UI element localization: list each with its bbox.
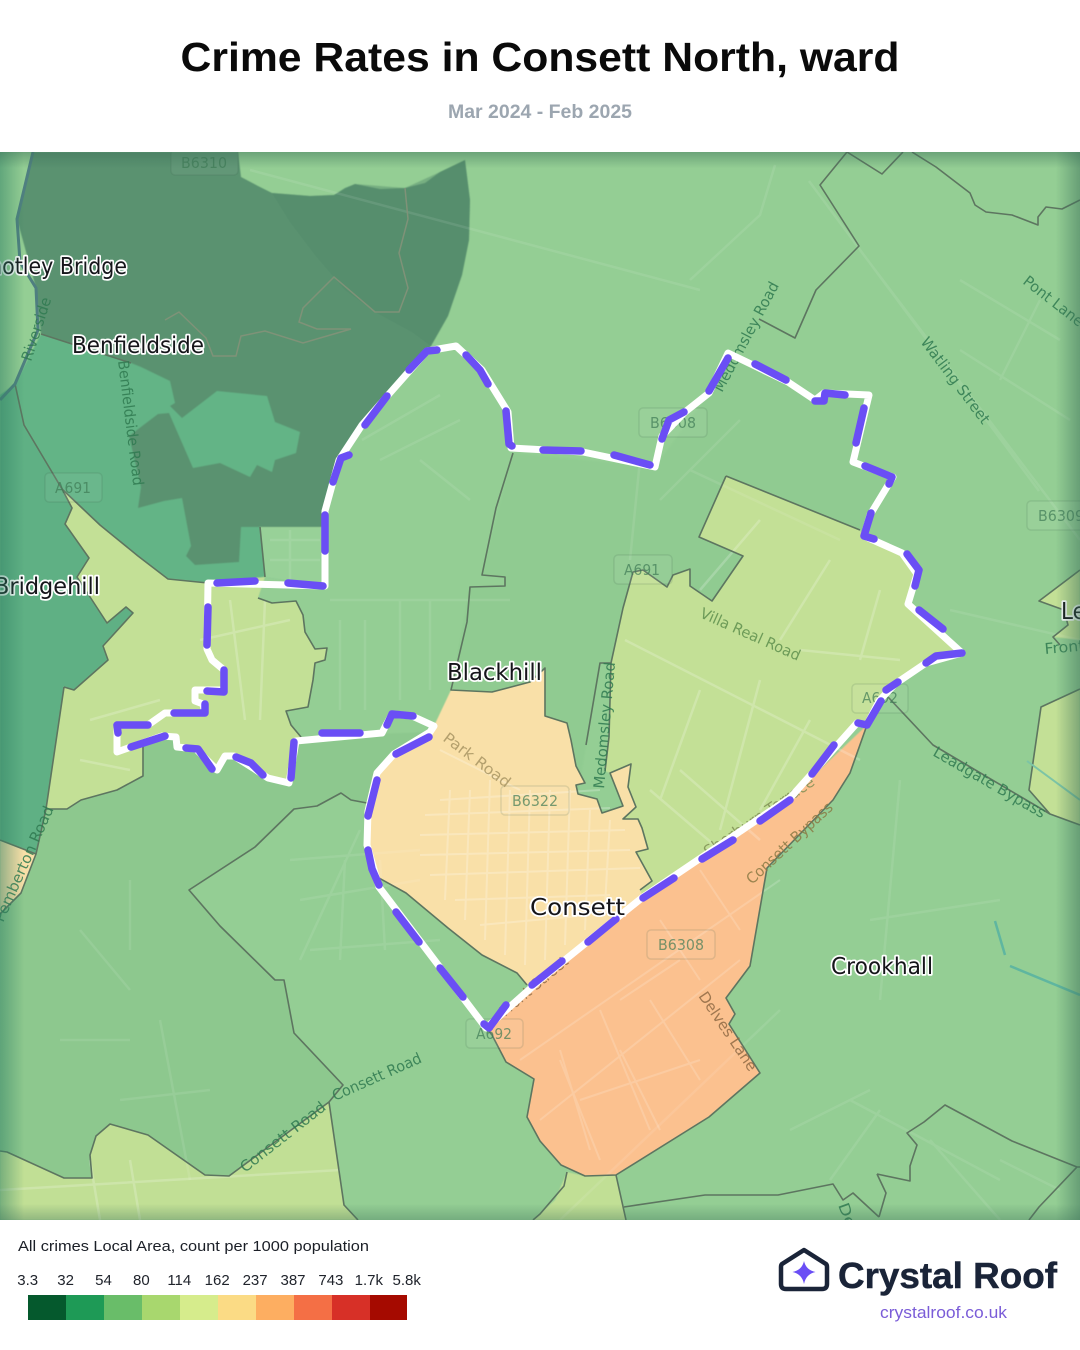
area: yellow-green Leadgate [1039,570,1080,640]
area: yellow-green east [605,476,962,897]
legend scale labels: 387 [280,1272,306,1289]
legend scale labels: 114 [167,1272,191,1289]
legend scale labels: 743 [318,1272,343,1289]
legend scale labels [17,1272,421,1289]
badge: A691 west: A691 [55,479,91,497]
choropleth areas [0,152,1080,1220]
ward boundary: Consett North [117,346,962,1028]
badge: A692 east [852,684,908,713]
legend scale labels: 1.7k [355,1272,383,1289]
icon: house outline with star [781,1250,827,1289]
badge: B6310 [170,157,237,168]
legend scale labels: 237 [243,1272,268,1289]
area: yellow-green west [46,489,327,809]
legend scale labels: 3.3 [17,1272,38,1289]
place: Blackhill: Blackhill [447,660,542,686]
road label: Park Road: Park Road [440,729,514,791]
road network [0,165,1080,1220]
badge: B6310: B6310 [181,154,227,172]
badge: B6308 north [639,408,707,437]
logo: Crystal Roof [781,1250,1058,1322]
road label: Riverside: Riverside [18,295,55,363]
road name labels [0,272,1080,1235]
place labels [0,254,1080,980]
road label: Consett Road south: Consett Road [236,1098,329,1176]
title: Crime Rates in Consett North, ward [180,34,900,80]
badge: A691 west [45,473,102,502]
place: Consett: Consett [530,895,625,921]
road label: Medomsley Road south: Medomsley Road [590,661,619,789]
badge: B6322: B6322 [512,792,558,810]
legend title: All crimes Local Area, count per 1000 population [18,1238,369,1255]
legend scale labels: 5.8k [393,1272,421,1289]
badge: A691 centre [614,555,672,584]
area: central darker tone [451,353,893,794]
road label: Front Street: Front Street [496,952,572,1020]
route number badges [45,150,1080,1048]
area: orange diagonal fill [796,728,865,800]
area: orange high crime [490,868,766,1176]
badge: B6309 [1027,501,1080,530]
legend scale labels: 32 [57,1272,74,1289]
ward dashes purple [117,350,962,1028]
road label: Villa Real Road: Villa Real Road [697,604,803,665]
road label: Sherburn Terrace: Sherburn Terrace [700,773,818,860]
website link: crystalroof.co.uk [880,1304,1008,1322]
road label: Consett Bypass: Consett Bypass [742,798,837,888]
badge: A692 east: A692 [862,689,898,707]
area: mid green strip far west [0,384,133,854]
area: dark green lowest crime [17,152,470,565]
road label: Delves south: Del [834,1200,861,1235]
legend scale labels: 162 [205,1272,230,1289]
road label: Watling Street: Watling Street [917,334,994,428]
ward outline white [117,346,962,1028]
badge: A691 centre: A691 [624,561,660,579]
legend colour bar [28,1295,407,1320]
area: yellow-green south [533,1172,626,1220]
badge: A692 west: A692 [476,1025,512,1043]
area: pale orange Consett [367,668,652,985]
area: mid green west [15,334,325,586]
area: yellow-green south-west [0,1102,358,1220]
badge: B6308 north: B6308 [650,414,696,432]
road label: Leadgate Bypass: Leadgate Bypass [930,743,1049,822]
boundary lines of neighbouring areas [0,152,1080,1220]
place: Crookhall: Crookhall [831,954,933,980]
badge: B6308 south: B6308 [658,936,704,954]
road label: Delves Lane: Delves Lane [695,988,761,1075]
road label: Benfieldside Road: Benfieldside Road [114,359,147,487]
area: yellow-green east edge [1029,689,1080,825]
map edge shading [0,152,1080,1220]
subtitle: date range: Mar 2024 - Feb 2025 [448,102,632,123]
badge: B6322 [501,786,569,815]
area: lighter residential cell [260,526,322,582]
road label: Consett Road north: Consett Road [329,1049,424,1105]
area: darker lobe inside dark green [358,172,438,190]
logo wordmark: Crystal Roof [838,1255,1058,1296]
legend [17,1238,421,1320]
legend scale labels: 80 [133,1272,150,1289]
area: south-west darker green [0,732,430,1178]
area: pale orange far west [0,840,36,914]
badge: A692 west [466,1019,523,1048]
place: Benfieldside: Benfieldside [72,333,204,359]
badge: B6308 south [647,930,715,959]
legend scale labels: 54 [95,1272,112,1289]
road label: Medomsley Road north: Medomsley Road [710,279,783,395]
map base: low crime green [0,152,1080,1220]
